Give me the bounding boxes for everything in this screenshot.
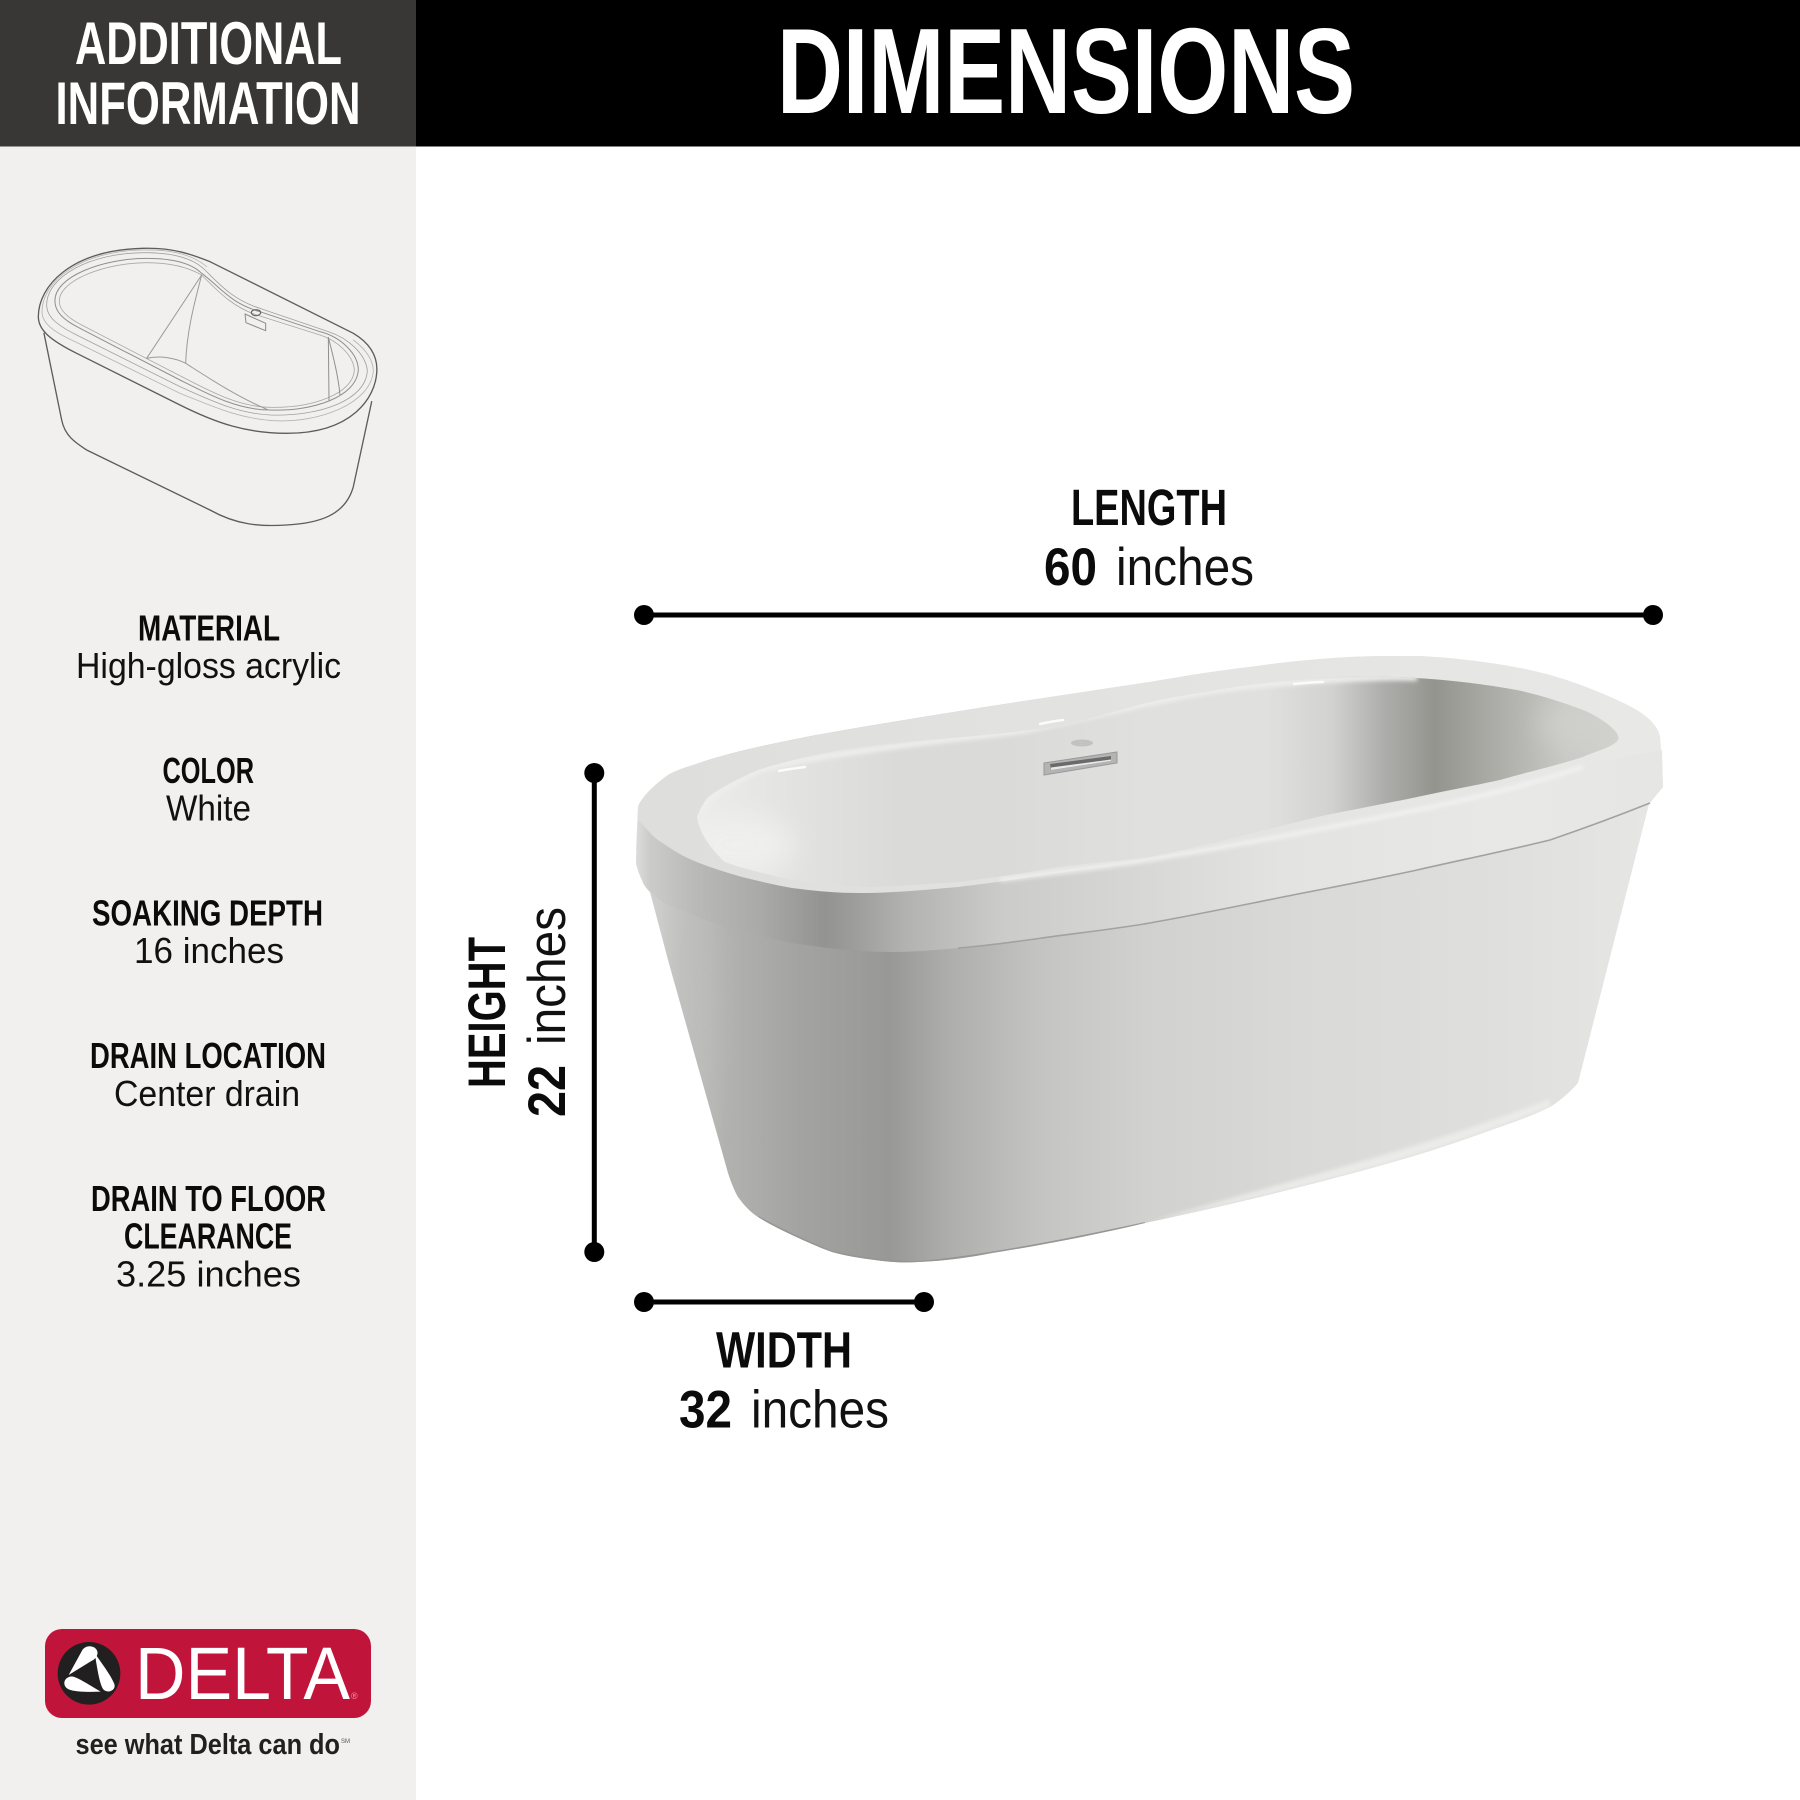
spec: drain to floor clearance: CLEARANCE	[124, 1216, 292, 1256]
bathtub photo illustration	[620, 640, 1680, 1280]
tub body	[620, 640, 1680, 1280]
spec: material	[76, 608, 341, 686]
spec: drain to floor clearance	[91, 1178, 326, 1294]
header: dimensions title: DIMENSIONS	[777, 3, 1355, 139]
spec: drain to floor clearance: DRAIN TO FLOOR	[91, 1178, 326, 1219]
header: additional information: INFORMATION	[56, 70, 360, 137]
dimension: length: inches	[1116, 538, 1254, 597]
icon: delta tri-lobe mark	[58, 1642, 120, 1705]
front rim highlight	[1000, 767, 1583, 880]
glossy highlights	[779, 682, 1323, 771]
header: additional information	[0, 0, 416, 146]
sidebar panel background	[0, 0, 416, 1800]
logo: delta badge: DELTA	[135, 1632, 351, 1715]
spec: material: MATERIAL	[138, 608, 280, 648]
spec: drain location: DRAIN LOCATION	[90, 1035, 326, 1076]
width arrow line	[634, 1292, 934, 1312]
dimension: length: LENGTH	[1071, 479, 1227, 536]
logo tagline: SM	[341, 1739, 350, 1745]
tub rim band	[636, 750, 1663, 952]
dimension: height	[458, 763, 604, 1262]
spec: soaking depth	[92, 892, 323, 971]
spec: soaking depth: SOAKING DEPTH	[92, 892, 323, 934]
dimension: height: 22	[518, 1065, 577, 1117]
logo tagline: see what Delta can do	[76, 1729, 340, 1761]
icon: tub line drawing	[38, 248, 377, 526]
dimension: width: WIDTH	[716, 1322, 852, 1378]
spec: color: White	[166, 788, 251, 828]
band shadow edge	[958, 803, 1650, 948]
header: additional information: ADDITIONAL	[75, 10, 342, 77]
spec: color	[162, 750, 254, 828]
header: dimensions title	[416, 0, 1800, 146]
spec: color: COLOR	[162, 750, 254, 791]
spec: material: High-gloss acrylic	[76, 645, 341, 686]
dimension: width: 32	[679, 1380, 732, 1440]
dimension: length: 60	[1044, 538, 1097, 597]
tub bowl interior	[697, 676, 1618, 876]
tub rim top surface	[636, 656, 1662, 900]
spec: drain to floor clearance: 3.25 inches	[116, 1254, 301, 1294]
height arrow line	[584, 763, 604, 1262]
overflow drain	[1044, 740, 1117, 775]
dimension: height: inches	[518, 907, 577, 1045]
spec: drain location: Center drain	[114, 1073, 300, 1114]
dimension: height: HEIGHT	[458, 937, 517, 1088]
dimension: width	[634, 1292, 934, 1440]
spec: soaking depth: 16 inches	[134, 930, 284, 971]
logo: delta badge: ®	[351, 1691, 358, 1701]
dimension: length	[634, 479, 1663, 625]
dimension: width: inches	[751, 1380, 889, 1440]
logo: delta badge	[45, 1629, 371, 1718]
spec: drain location	[90, 1035, 326, 1114]
length arrow line	[634, 605, 1663, 625]
